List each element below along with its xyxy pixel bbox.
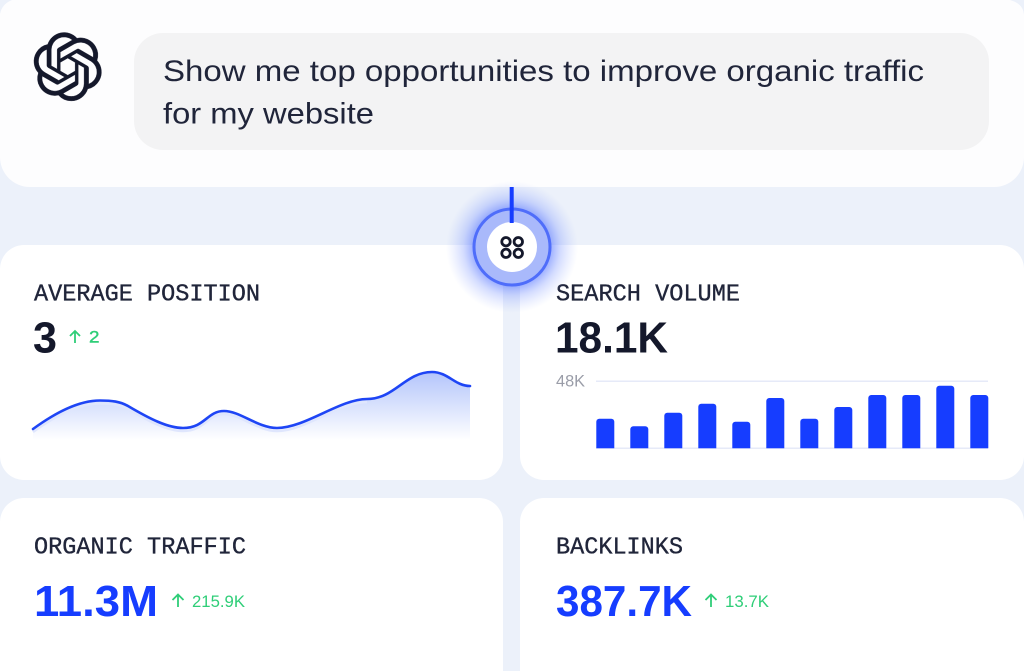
delta: up 2: 2 [89, 328, 100, 346]
heading: organic traffic: ORGANIC TRAFFIC [34, 534, 246, 562]
prompt text: Show me top opportunities to improve organic traffic [163, 55, 924, 88]
delta: up 2 [70, 328, 100, 346]
connector node [446, 181, 578, 313]
heading: average position: AVERAGE POSITION [34, 282, 260, 308]
panel: search volume [520, 245, 1024, 480]
icon: OpenAI logo [34, 33, 101, 101]
panel: organic traffic [0, 498, 503, 671]
line chart [33, 372, 470, 440]
panel: average position [0, 245, 503, 480]
bar chart [556, 372, 988, 449]
delta: up 215.9K: 215.9K [192, 592, 246, 611]
panel: prompt [0, 0, 1024, 187]
axis label: 48K: 48K [556, 372, 585, 390]
prompt bubble [134, 33, 989, 150]
delta: up 13.7K [706, 592, 770, 611]
heading: backlinks: BACKLINKS [556, 534, 683, 562]
value: 3: 3 [33, 314, 57, 362]
value: 18.1K: 18.1K [555, 314, 668, 362]
prompt text: for my website [163, 98, 374, 130]
icon: four rings [502, 238, 522, 258]
panel: backlinks [520, 498, 1024, 671]
delta: up 13.7K: 13.7K [725, 592, 770, 611]
heading: search volume: SEARCH VOLUME [556, 282, 740, 308]
value: 387.7K: 387.7K [556, 577, 692, 626]
value: 11.3M: 11.3M [34, 577, 158, 626]
